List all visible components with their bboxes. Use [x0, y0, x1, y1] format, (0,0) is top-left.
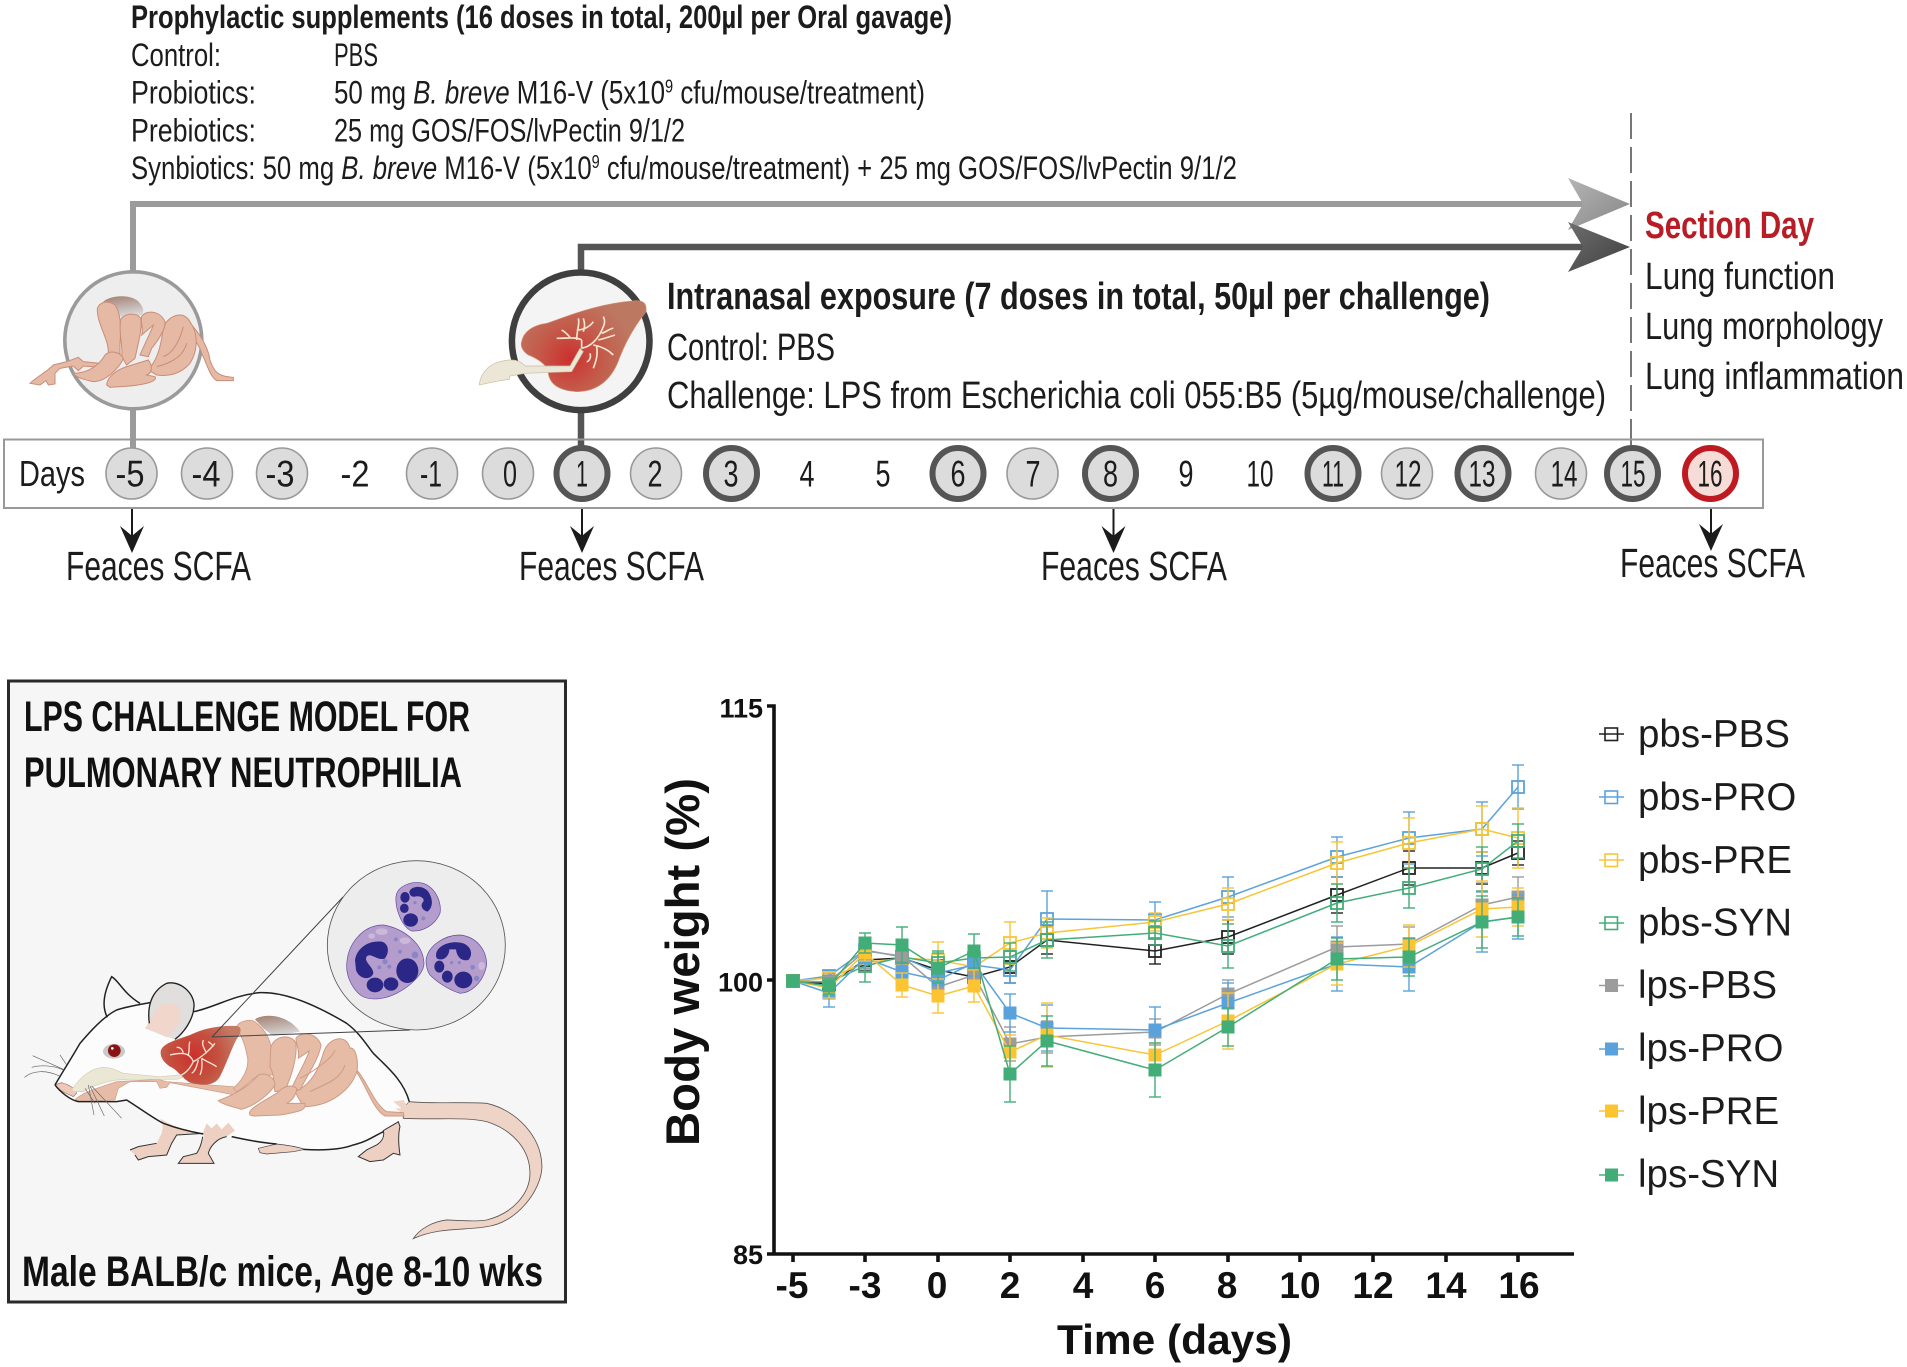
- panel: LPS challenge model: [8, 681, 566, 1302]
- legend: lps-SYN: [1638, 1153, 1779, 1196]
- day numbers: 2: [648, 454, 662, 494]
- legend: pbs-PBS: [1638, 713, 1790, 756]
- x axis labels: 16: [1498, 1265, 1540, 1306]
- day numbers: 3: [724, 454, 738, 494]
- text block: section day readouts: Section Day: [1645, 205, 1814, 247]
- y axis labels: [718, 694, 763, 1270]
- day numbers: 14: [1550, 454, 1578, 494]
- panel heading: [24, 693, 470, 797]
- y axis labels: 85: [733, 1240, 763, 1270]
- y axis labels: 100: [718, 968, 763, 998]
- text block: supplement groups: Prebiotics:: [131, 112, 256, 148]
- legend: lps-PBS: [1638, 964, 1777, 1007]
- text block: supplement groups: [131, 37, 1237, 186]
- y axis labels: 115: [719, 694, 763, 724]
- text block: intranasal exposure: Control: PBS: [667, 327, 835, 369]
- legend: lps-PRE: [1638, 1090, 1779, 1133]
- day numbers: 6: [950, 454, 966, 494]
- day numbers: 12: [1394, 454, 1422, 494]
- x axis labels: 14: [1425, 1265, 1467, 1306]
- day numbers: -2: [340, 454, 370, 494]
- x axis labels: [776, 1265, 1540, 1306]
- day numbers: 15: [1620, 454, 1646, 494]
- series: pbs-SYN: [793, 824, 1518, 987]
- text block: intranasal exposure: Intranasal exposure (7 doses in total, 50µl per challenge): [667, 276, 1490, 318]
- labels: faeces SCFA: Feaces SCFA: [1041, 543, 1227, 589]
- day numbers: 4: [800, 454, 814, 494]
- legend: pbs-PRO: [1638, 776, 1796, 819]
- text block: intranasal exposure: Challenge: LPS from Escherichia coli 055:B5 (5µg/mouse/challenge): [667, 375, 1606, 417]
- text block: supplement groups: PBS: [334, 37, 378, 73]
- x axis labels: -5: [776, 1265, 808, 1306]
- labels: faeces SCFA: Feaces SCFA: [519, 543, 704, 589]
- day numbers: -4: [192, 454, 220, 494]
- day numbers: 10: [1246, 454, 1274, 494]
- labels: faeces SCFA: Feaces SCFA: [66, 543, 251, 589]
- text block: supplement groups: cfu/mouse/treatment) + 25 mg GOS/FOS/lvPectin 9/1/2: [600, 150, 1237, 186]
- dashed line: section day marker: [1630, 113, 1632, 445]
- legend: pbs-SYN: [1638, 902, 1792, 944]
- chart: body weight: [656, 694, 1574, 1363]
- series: lps-PRO: [793, 892, 1518, 1053]
- text block: intranasal exposure: [667, 276, 1606, 417]
- day numbers: 7: [1026, 454, 1040, 494]
- panel heading: LPS CHALLENGE MODEL FOR: [24, 693, 470, 741]
- text block: supplement groups: 50 mg B. breve M16-V (5x10: [334, 74, 702, 110]
- callout: neutrophil magnification: [212, 861, 505, 1037]
- panel footer: Male BALB/c mice, Age 8-10 wks: [22, 1248, 543, 1296]
- series: lps-PBS: [793, 877, 1518, 1061]
- series: lps-SYN: [793, 896, 1518, 1102]
- x axis labels: 10: [1279, 1265, 1321, 1306]
- x axis labels: -3: [849, 1265, 881, 1306]
- label: days: Days: [19, 453, 85, 494]
- series: pbs-PRO: [793, 765, 1518, 983]
- x axis labels: 0: [927, 1265, 947, 1306]
- axes: [767, 706, 1574, 1262]
- arrow: prophylactic supplements period: [133, 178, 1630, 450]
- day numbers: 8: [1103, 454, 1118, 494]
- day numbers: 9: [1178, 454, 1194, 494]
- day numbers: -1: [420, 454, 442, 494]
- legend: [1599, 713, 1796, 1196]
- x axis labels: 12: [1352, 1265, 1394, 1306]
- text block: supplement groups: Control:: [131, 37, 221, 73]
- dosing day circles: [556, 448, 1658, 499]
- legend: lps-PRO: [1638, 1027, 1783, 1070]
- text block: section day readouts: Lung function: [1645, 256, 1835, 298]
- day circles: [106, 448, 1586, 499]
- labels: faeces SCFA: [66, 540, 1805, 589]
- text block: supplement groups: 9: [665, 76, 673, 96]
- icon: intestine in circle: [30, 272, 233, 409]
- text block: supplement groups: Probiotics:: [131, 74, 256, 110]
- x axis labels: 2: [1000, 1265, 1020, 1306]
- section day circle: [1685, 448, 1736, 499]
- x axis labels: 8: [1217, 1265, 1237, 1306]
- legend: pbs-PRE: [1638, 839, 1792, 882]
- x axis labels: 4: [1073, 1265, 1094, 1306]
- text block: supplement groups: cfu/mouse/treatment): [673, 74, 925, 110]
- illustration: mouse: [24, 977, 542, 1239]
- day numbers: [116, 454, 1722, 494]
- icon: inflamed lung in circle: [479, 272, 650, 410]
- arrows: faeces sampling: [120, 509, 1723, 553]
- panel heading: PULMONARY NEUTROPHILIA: [24, 749, 462, 797]
- labels: faeces SCFA: Feaces SCFA: [1620, 540, 1805, 586]
- y axis title: Body weight (%): [656, 778, 709, 1146]
- heading: prophylactic supplements: Prophylactic supplements (16 doses in total, 200µl per Oral gavage): [131, 0, 952, 35]
- text block: section day readouts: [1645, 205, 1904, 398]
- day numbers: 0: [503, 454, 517, 494]
- x axis labels: 6: [1145, 1265, 1165, 1306]
- timeline: days: [4, 440, 1763, 508]
- series: lps-PRE: [793, 881, 1518, 1069]
- x axis title: Time (days): [1057, 1316, 1292, 1363]
- day numbers: 11: [1322, 454, 1344, 494]
- day numbers: 16: [1698, 454, 1722, 494]
- arrow: intranasal exposure period: [581, 222, 1630, 446]
- text block: supplement groups: Synbiotics: 50 mg B. breve M16-V (5x10: [131, 150, 629, 186]
- series: pbs-PBS: [793, 841, 1518, 992]
- text block: supplement groups: 25 mg GOS/FOS/lvPectin 9/1/2: [334, 112, 685, 148]
- day numbers: 5: [876, 454, 890, 494]
- text block: supplement groups: 9: [592, 152, 600, 172]
- day numbers: 13: [1468, 454, 1496, 494]
- series: pbs-PRE: [793, 806, 1518, 984]
- day numbers: 1: [576, 454, 588, 494]
- day numbers: -5: [116, 454, 144, 494]
- day numbers: -3: [266, 454, 294, 494]
